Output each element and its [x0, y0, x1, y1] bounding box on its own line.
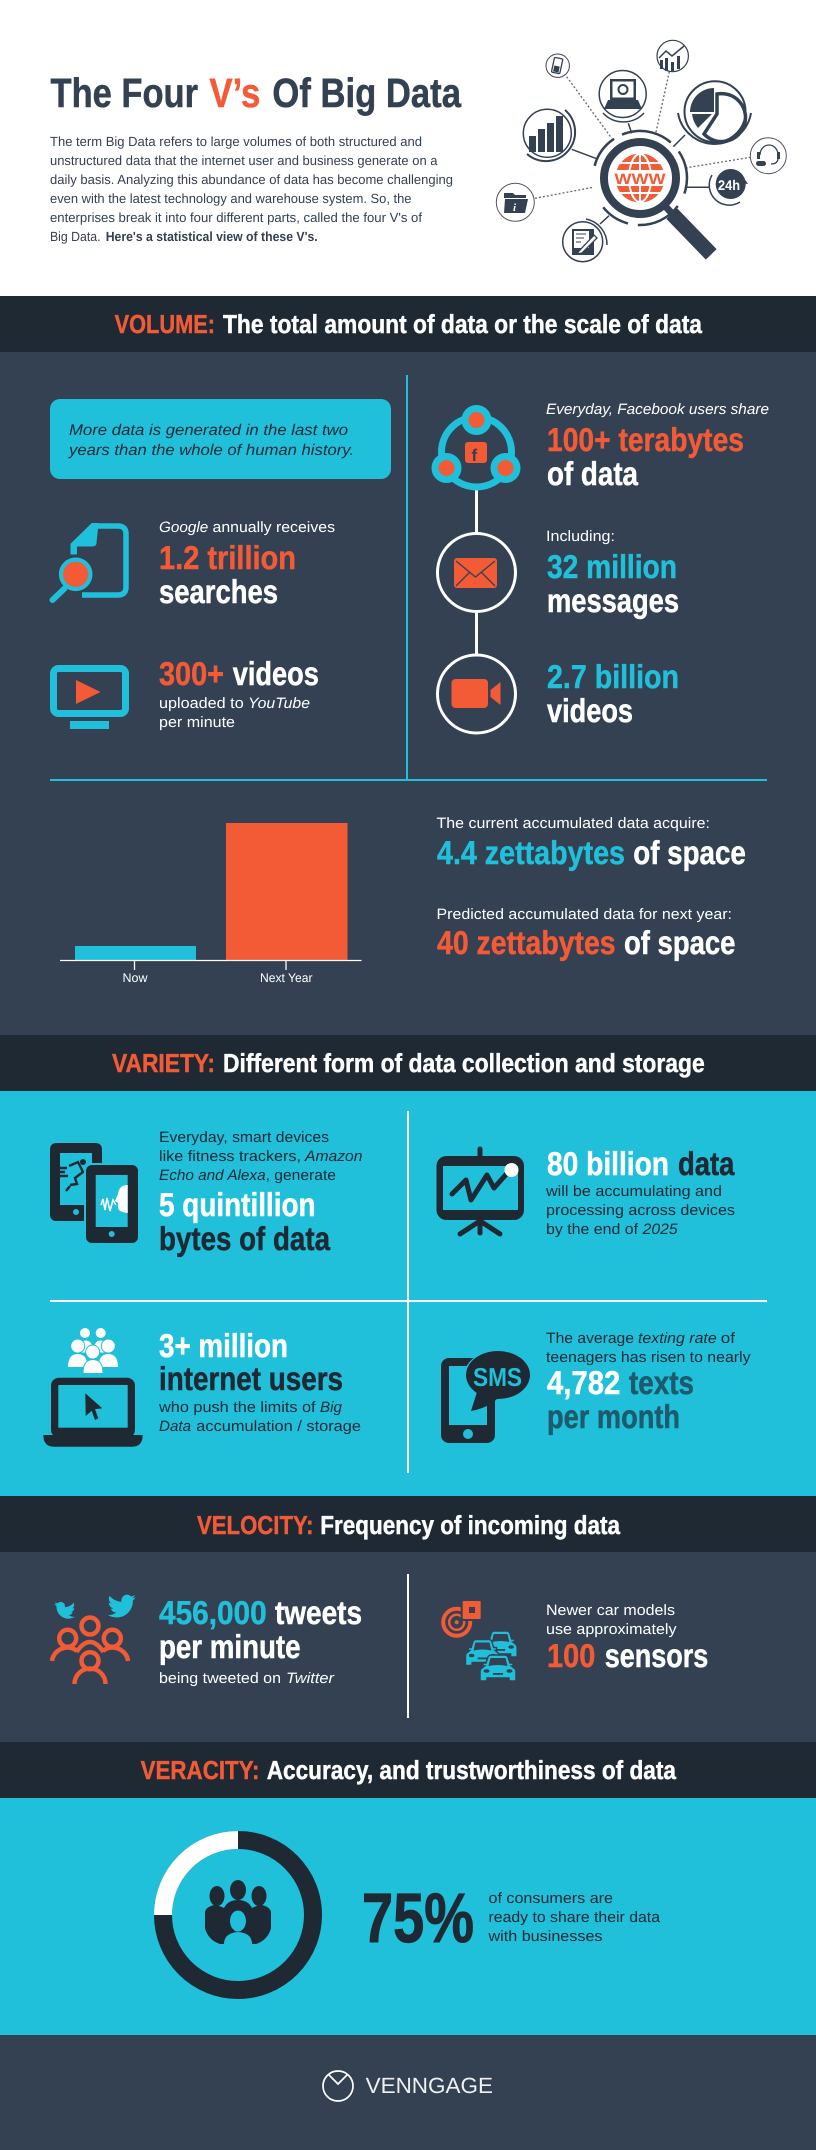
panel: velocity [0, 1552, 816, 1742]
stat: 75 percent: 75% [362, 1879, 474, 1957]
stat: predicted data: of space [624, 924, 735, 961]
stat: internet users: Data [159, 1418, 191, 1435]
stat: internet users [158, 1327, 361, 1435]
callout: human history: More data is generated in the last two [69, 422, 348, 439]
panel: variety [0, 1091, 816, 1496]
stat: texting rate: 4,782 [547, 1364, 620, 1401]
title: V’s [209, 70, 260, 116]
stat: google searches: 1.2 trillion [159, 539, 296, 576]
stat: texting rate: teenagers has risen to nearly [546, 1349, 751, 1366]
stat: youtube videos: 300+ [159, 655, 224, 692]
icon: envelope circle [438, 534, 516, 612]
icon: folder circle [496, 183, 534, 221]
section bar: velocity [0, 1496, 816, 1552]
intro text block: Here's a statistical view of these V's. [106, 229, 318, 244]
intro text block: enterprises break it into four different parts, called the four V's of [50, 210, 422, 225]
stat: texting rate: of [721, 1330, 736, 1347]
stat: internet users: Big [320, 1399, 343, 1416]
icon: pie chart circle [678, 81, 751, 144]
stat: smart devices: 5 quintillion [159, 1186, 316, 1223]
icon: www globe: WWW [614, 171, 666, 188]
icon: smart devices [50, 1143, 140, 1247]
stat: texting rate: per month [547, 1398, 680, 1435]
stat: videos: videos [547, 692, 633, 729]
stat: facebook terabytes: of data [547, 455, 639, 492]
section bar: veracity [0, 1742, 816, 1798]
stat: google searches: Google [159, 519, 208, 536]
intro text block: daily basis. Analyzing this abundance of data has become challenging [50, 172, 453, 187]
icon: google search document [52, 524, 126, 600]
callout: human history: years than the whole of human history. [68, 442, 354, 459]
icon: people and laptop [43, 1328, 143, 1447]
section bar: veracity: Accuracy, and trustworthiness of data [267, 1755, 676, 1785]
text: consumers: with businesses [487, 1928, 602, 1945]
bar chart: zettabytes: Now [122, 971, 148, 985]
icon: www globe [612, 154, 668, 202]
stat: messages: 32 million [547, 548, 677, 585]
icon: line chart circle [657, 40, 688, 72]
stat: messages: messages [547, 582, 679, 619]
stat: sensors [546, 1602, 708, 1674]
icon: magnifier handle [666, 207, 706, 249]
intro text block: even with the latest technology and warehouse system. So, the [50, 191, 412, 206]
section bar: veracity: VERACITY: [141, 1755, 259, 1785]
stat: google searches [159, 519, 335, 610]
stat: smart devices: Amazon [304, 1148, 362, 1165]
broken outer ring [582, 120, 698, 236]
panel: header background [0, 0, 816, 296]
stat: tweets: tweets [275, 1594, 362, 1631]
stat: sensors: use approximately [546, 1621, 677, 1638]
stat: youtube videos: YouTube [248, 695, 310, 712]
icon: 24h circle [709, 169, 748, 205]
donut chart: 75 percent [163, 1840, 313, 1990]
stat: internet users: internet users [159, 1360, 343, 1397]
stat: 80 billion [545, 1145, 735, 1238]
stat: sensors: Newer car models [546, 1602, 675, 1619]
title: Of Big Data [272, 70, 462, 116]
text: consumers: ready to share their data [488, 1909, 661, 1926]
text: consumers [487, 1890, 661, 1945]
section bar: volume [0, 296, 816, 352]
stat: messages: Including: [546, 528, 615, 545]
stat: internet users: who push the limits of [158, 1399, 316, 1416]
icon: video monitor [54, 668, 126, 729]
stat: youtube videos [159, 655, 319, 731]
stat: predicted data: Predicted accumulated data for next year: [436, 906, 732, 923]
stat: current data: 4.4 zettabytes [437, 834, 625, 871]
icon: magnifier lens [604, 142, 676, 214]
icon: radar and cars [443, 1600, 517, 1681]
panel: volume [0, 352, 816, 1035]
illustration: big data magnifier with satellite icons [496, 40, 786, 262]
icon: 24h circle: 24h [718, 177, 740, 193]
stat: messages [546, 528, 679, 619]
icon: sms phone: SMS [473, 1362, 522, 1392]
intro text block [50, 134, 453, 244]
section bar: velocity: VELOCITY: [197, 1510, 314, 1540]
stat: google searches: annually receives [212, 519, 335, 536]
icon: bar chart circle [523, 109, 575, 161]
section bar: velocity: Frequency of incoming data [320, 1510, 620, 1540]
stat: tweets: 456,000 [159, 1594, 267, 1631]
section bar: volume: The total amount of data or the scale of data [223, 309, 702, 339]
stat: texting rate: texting rate [638, 1330, 717, 1347]
stat: tweets: being tweeted on [159, 1670, 281, 1687]
stat: current data: The current accumulated data acquire: [436, 815, 710, 832]
intro text block: unstructured data that the internet user and business generate on a [50, 153, 438, 168]
icon: consumers group [205, 1880, 271, 1944]
title [50, 70, 462, 116]
text: consumers: of consumers are [488, 1890, 613, 1907]
stat: videos: 2.7 billion [547, 658, 679, 695]
panel: veracity [0, 1798, 816, 2035]
stat: smart devices [159, 1129, 362, 1257]
icon: presentation board [436, 1149, 524, 1234]
stat: smart devices: bytes of data [159, 1220, 331, 1257]
stat: videos [547, 658, 679, 729]
stat: internet users: 3+ million [159, 1327, 288, 1364]
stat: texting rate: texts [629, 1364, 694, 1401]
stat: 80 billion: processing across devices [546, 1202, 735, 1219]
bar chart: zettabytes [60, 823, 362, 985]
title: The Four [50, 70, 198, 116]
icon: notes and pencil circle [563, 219, 607, 262]
icon: phone circle [546, 54, 569, 77]
stat: smart devices: Echo and Alexa [159, 1167, 266, 1184]
stat: 80 billion: will be accumulating and [545, 1183, 722, 1200]
intro text block: Big Data. [50, 229, 100, 244]
stat: current data [436, 815, 746, 871]
panel: footer [0, 2035, 816, 2150]
stat: facebook terabytes: 100+ terabytes [547, 421, 744, 458]
stat: predicted data [436, 906, 735, 961]
stat: google searches: searches [159, 573, 278, 610]
stat: youtube videos: per minute [159, 714, 235, 731]
stat: tweets: per minute [159, 1628, 300, 1665]
stat: predicted data: 40 zettabytes [437, 924, 616, 961]
wordmark: VENNGAGE [366, 2073, 493, 2098]
stat: facebook terabytes [546, 401, 769, 492]
icon: venngage logo [323, 2071, 353, 2101]
stat: facebook terabytes: Everyday, Facebook users share [546, 401, 769, 418]
icon: twitter people [52, 1595, 136, 1684]
stat: tweets [159, 1594, 362, 1687]
stat: 80 billion: by the end of [546, 1221, 639, 1238]
section bar: variety: Different form of data collection and storage [223, 1048, 705, 1078]
icon: laptop circle [599, 70, 646, 122]
stat: sensors: 100 [547, 1637, 595, 1674]
stat: tweets: Twitter [286, 1670, 335, 1687]
section bar: variety [0, 1035, 816, 1091]
icon: video camera circle [438, 655, 516, 733]
stat: smart devices: , generate [266, 1167, 336, 1184]
stat: current data: of space [633, 834, 746, 871]
stat: smart devices: like fitness trackers, [159, 1148, 301, 1165]
stat: smart devices: Everyday, smart devices [159, 1129, 329, 1146]
section bar: variety: VARIETY: [112, 1048, 215, 1078]
icon: facebook network [435, 408, 517, 655]
stat: 80 billion: 80 billion [547, 1145, 669, 1182]
callout: human history [50, 399, 391, 479]
stat: sensors: sensors [605, 1637, 708, 1674]
intro text block: The term Big Data refers to large volumes of both structured and [50, 134, 422, 149]
bar chart: zettabytes: Next Year [260, 971, 312, 985]
stat: 80 billion: data [678, 1145, 735, 1182]
stat: youtube videos: uploaded to [159, 695, 244, 712]
icon: folder circle: i [513, 202, 517, 214]
icon: sms phone [441, 1350, 532, 1443]
icon: facebook network: f [472, 446, 478, 465]
stat: internet users: accumulation / storage [196, 1418, 361, 1435]
stat: texting rate: The average [546, 1330, 634, 1347]
stat: youtube videos: videos [233, 655, 319, 692]
stat: 80 billion: 2025 [642, 1221, 678, 1238]
icon: headset circle [750, 138, 786, 174]
stat: texting rate [546, 1330, 751, 1435]
section bar: volume: VOLUME: [115, 309, 215, 339]
